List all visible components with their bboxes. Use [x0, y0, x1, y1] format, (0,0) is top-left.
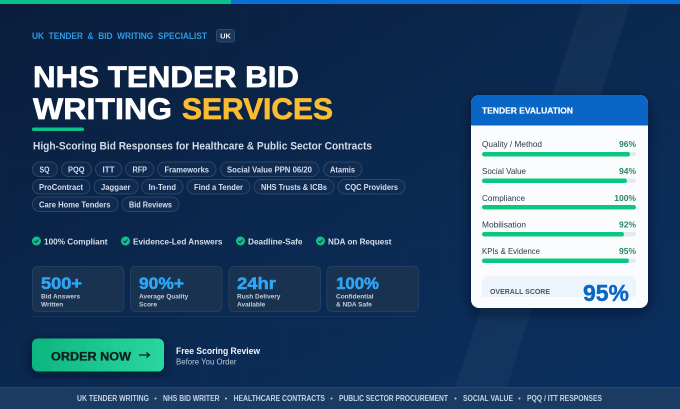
overall score	[482, 276, 636, 306]
review note: Free Scoring Review	[176, 346, 261, 356]
title underline	[32, 128, 84, 131]
score: Mobilisation: 92%	[619, 220, 636, 230]
score: Compliance: Compliance	[482, 193, 525, 203]
stat: 500+	[32, 266, 124, 312]
tag chips: Find a Tender	[194, 183, 243, 192]
title: NHS TENDER BID	[33, 61, 299, 94]
overall score: 95%	[583, 280, 629, 306]
tag chips: ITT	[102, 166, 115, 174]
stat: 90%+: 90%+	[139, 275, 184, 293]
badge: UK	[216, 30, 234, 42]
tag chips	[32, 162, 405, 212]
score: Social Value: Social Value	[482, 166, 526, 176]
tag chips: ProContract	[39, 183, 83, 192]
order button	[32, 338, 164, 372]
top accent bar	[0, 0, 680, 4]
stat: 100%: Confidential	[336, 294, 374, 300]
score: Compliance: 100%	[614, 193, 636, 203]
review note	[176, 346, 261, 366]
stat: 90%+: Score	[139, 302, 157, 308]
tag chips: Atamis	[330, 166, 356, 174]
keyword footer: PUBLIC SECTOR PROCUREMENT	[339, 394, 448, 403]
score: Social Value	[482, 166, 636, 183]
badge: UK: UK	[220, 32, 231, 41]
tag chips: Social Value PPN 06/20	[227, 166, 313, 174]
keyword footer	[0, 387, 680, 409]
keyword footer: PQQ / ITT RESPONSES	[527, 394, 603, 403]
score: Quality / Method: 96%	[619, 139, 636, 149]
title	[33, 61, 333, 126]
tag chips: CQC Providers	[345, 183, 399, 192]
check: NDA on Request: NDA on Request	[328, 236, 392, 246]
score: Mobilisation	[482, 220, 636, 236]
stat cards	[32, 266, 418, 312]
check: Deadline-Safe: Deadline-Safe	[248, 236, 303, 246]
order button: ORDER NOW	[51, 352, 131, 364]
stat: 100%: & NDA Safe	[336, 302, 372, 308]
check: 100% Compliant: 100% Compliant	[44, 236, 108, 246]
panel: tender evaluation	[471, 95, 648, 308]
stat: 500+: Bid Answers	[41, 294, 81, 300]
tag chips: Care Home Tenders	[39, 200, 111, 210]
score: Mobilisation: Mobilisation	[482, 220, 526, 230]
tag chips: Frameworks	[164, 166, 210, 174]
keyword footer: UK TENDER WRITING	[77, 394, 149, 403]
title: SERVICES	[182, 93, 333, 126]
overall score: OVERALL SCORE	[490, 287, 550, 296]
review note: Before You Order	[176, 358, 237, 366]
tag chips: PQQ	[68, 166, 84, 174]
score: Social Value: 94%	[619, 166, 636, 176]
assurance checks	[32, 236, 392, 246]
tag chips: SQ	[40, 166, 50, 174]
tag chips: RFP	[132, 166, 148, 174]
stat: 500+: 500+	[41, 275, 82, 293]
card title: TENDER EVALUATION	[482, 106, 573, 116]
score: Quality / Method: Quality / Method	[482, 139, 542, 149]
tag chips: NHS Trusts & ICBs	[261, 183, 328, 192]
score: Compliance	[482, 193, 636, 210]
tag chips: In-Tend	[148, 183, 176, 192]
keyword footer: SOCIAL VALUE	[463, 394, 514, 403]
check: Evidence-Led Answers: Evidence-Led Answers	[133, 236, 223, 246]
stat: 90%+	[130, 266, 222, 312]
stat: 24hr: 24hr	[237, 275, 277, 293]
tag chips: Jaggaer	[101, 183, 130, 192]
score: KPIs & Evidence: KPIs & Evidence	[482, 246, 540, 256]
stat: 100%	[327, 266, 418, 312]
tag chips: Bid Reviews	[129, 200, 172, 210]
stat: 90%+: Average Quality	[139, 294, 189, 300]
eyebrow: UK TENDER & BID WRITING SPECIALIST	[32, 31, 207, 41]
subtitle: High-Scoring Bid Responses for Healthcare & Public Sector Contracts	[33, 140, 372, 152]
keyword footer: NHS BID WRITER	[163, 394, 220, 403]
stat: 100%: 100%	[336, 275, 379, 293]
score: KPIs & Evidence: 95%	[619, 246, 636, 256]
stat: 24hr: Available	[237, 302, 266, 308]
score: KPIs & Evidence	[482, 246, 636, 263]
icon: arrow	[139, 352, 150, 358]
title: WRITING	[33, 93, 172, 126]
stat: 24hr	[229, 266, 320, 312]
keyword footer: HEALTHCARE CONTRACTS	[234, 394, 326, 403]
stat: 24hr: Rush Delivery	[237, 294, 281, 300]
score: Quality / Method	[482, 139, 636, 156]
stat: 500+: Written	[41, 302, 63, 308]
card header	[471, 95, 648, 126]
